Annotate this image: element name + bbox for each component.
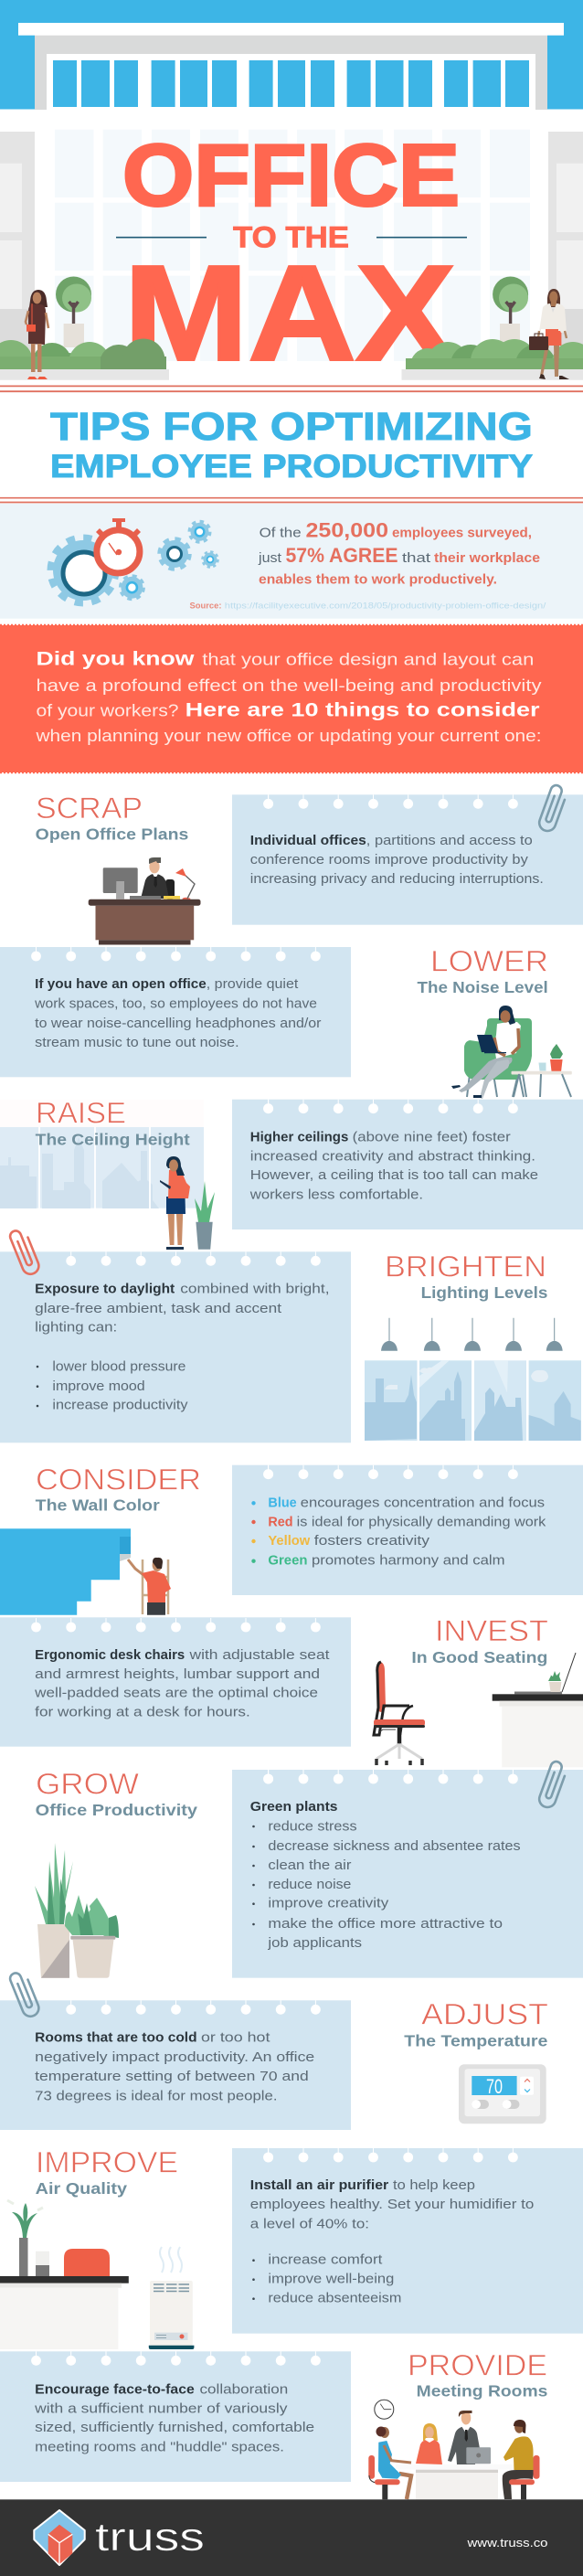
body text: with a sufficient number of variously: [34, 2401, 288, 2416]
statistic text: employees surveyed,: [392, 525, 532, 541]
section 5 heading: consider: CONSIDER: [36, 1463, 201, 1496]
right hedge: [406, 339, 583, 369]
body text: [250, 834, 544, 887]
illustration: office chair: [374, 1662, 425, 1765]
title word: OFFICE: OFFICE: [122, 126, 460, 225]
panel: survey statistic: [0, 504, 583, 619]
illustration: desk with laptop and plant: [493, 1653, 583, 1767]
body text: glare-free ambient, task and accent: [35, 1302, 281, 1316]
body text: sized, sufficiently furnished, comfortable: [35, 2421, 314, 2435]
body text: stream music to tune out noise.: [35, 1036, 239, 1050]
section 1 heading: scrap: [36, 792, 188, 843]
section 6 heading: invest: INVEST: [435, 1614, 548, 1647]
illustration: woman in armchair: [451, 1006, 572, 1099]
body text: , partitions and access to: [366, 834, 533, 848]
body text: with adjustable seat: [188, 1648, 329, 1663]
illustration: painted wall and painter: [0, 1528, 171, 1615]
body text: However, a ceiling that is too tall can make: [250, 1168, 538, 1183]
colour list: fosters creativity: [314, 1534, 430, 1549]
paperclip: [537, 783, 568, 834]
body text: [250, 2178, 534, 2306]
section 5 heading: consider: [36, 1463, 201, 1515]
section 9 heading: improve: [36, 2146, 178, 2198]
panel: scrap text: [232, 783, 583, 925]
stripes under subtitle: [0, 498, 583, 503]
body text: Higher ceilings: [250, 1130, 348, 1144]
illustration: humidifier: [149, 2247, 194, 2349]
section 9 heading: improve: IMPROVE: [36, 2146, 178, 2179]
panel: lower text: [0, 947, 351, 1077]
section 6 heading: invest: [411, 1614, 548, 1666]
clerestory window frame: [47, 54, 535, 110]
body text: Rooms that are too cold: [35, 2030, 197, 2045]
lobby glass panes: [55, 130, 530, 361]
body text: , provide quiet: [207, 977, 298, 992]
section 10 heading: provide: Meeting Rooms: [417, 2382, 547, 2400]
statistic text: 250,000: [305, 519, 388, 541]
paperclip: [8, 1227, 41, 1276]
body text: [249, 1130, 538, 1203]
body text: negatively impact productivity. An office: [35, 2050, 314, 2065]
header: office building: [0, 0, 583, 370]
logo: [34, 2510, 85, 2565]
body text: Exposure to daylight: [35, 1282, 175, 1296]
body text: combined with bright,: [180, 1282, 329, 1296]
icon: right tree: [493, 276, 528, 347]
source: https://facilityexecutive.com/2018/05/productivity-problem-office-design/: [225, 601, 546, 611]
section 2 heading: lower: [417, 945, 548, 996]
colour list: Green: [268, 1554, 307, 1569]
body text: increase comfort: [268, 2253, 382, 2268]
body text: meeting rooms and "huddle" spaces.: [35, 2441, 284, 2455]
body text: Encourage face-to-face: [35, 2382, 195, 2397]
title rules: [116, 237, 467, 239]
section 4 heading: brighten: BRIGHTEN: [385, 1251, 546, 1283]
colour list: encourages concentration and focus: [301, 1496, 545, 1510]
side table and plant: [512, 1044, 572, 1097]
wordmark: truss: [95, 2515, 205, 2560]
plant benefits list: decrease sickness and absentee rates: [268, 1839, 521, 1854]
body text: [34, 977, 322, 1050]
illustration: woman with tablet and plant: [160, 1156, 215, 1250]
intro text: [35, 648, 541, 745]
body text: increase productivity: [52, 1399, 188, 1413]
section 8 heading: adjust: The Temperature: [404, 2031, 548, 2049]
body text: employees healthy. Set your humidifier to: [250, 2198, 534, 2212]
section 4 heading: brighten: Lighting Levels: [421, 1283, 547, 1302]
panel: consider text: [232, 1465, 583, 1595]
illustration: potted plants: [35, 1843, 119, 1978]
colour list: Yellow: [268, 1534, 311, 1549]
body text: to help keep: [393, 2178, 475, 2193]
panel: provide text: [0, 2351, 351, 2482]
subtitle: [50, 405, 533, 484]
statistic text: enables them to work productively.: [259, 571, 497, 587]
paperclip: [537, 1760, 568, 1810]
body text: lower blood pressure: [52, 1359, 186, 1374]
body text: reduce absenteeism: [268, 2292, 401, 2306]
section 7 heading: grow: [36, 1768, 197, 1819]
illustration: counter with flowers: [0, 2200, 129, 2349]
illustration: man at desk: [89, 857, 201, 945]
plant benefits list: Green plants: [250, 1800, 338, 1815]
body text: Install an air purifier: [250, 2178, 389, 2193]
plant benefits list: job applicants: [267, 1936, 362, 1951]
illustration: meeting table and people: [368, 2411, 539, 2499]
section 2 heading: lower: LOWER: [430, 945, 548, 978]
building facade: [35, 35, 547, 110]
section 8 heading: adjust: ADJUST: [421, 1998, 548, 2031]
body text: work spaces, too, so employees do not have: [34, 997, 317, 1012]
footer: [0, 2499, 583, 2576]
statistic text: their workplace: [434, 550, 540, 566]
left chair: [368, 2455, 400, 2499]
table: [396, 2464, 514, 2499]
right chair: [509, 2455, 539, 2499]
stripes under header: [0, 386, 583, 391]
sidewalk planters: [0, 369, 583, 380]
section 3 heading: raise: [36, 1096, 190, 1148]
sky: [0, 0, 583, 110]
intro text: Did you know: [37, 648, 195, 669]
illustration: thermostat: 70: [486, 2075, 503, 2098]
body text: workers less comfortable.: [249, 1188, 423, 1203]
woman in blue dress: [376, 2426, 411, 2499]
body text: [34, 1648, 330, 1720]
statistic text: just: [258, 550, 282, 566]
plant benefits list: make the office more attractive to: [268, 1917, 503, 1932]
person: woman on phone: [26, 290, 48, 379]
title word: MAX: MAX: [124, 238, 455, 389]
section 9 heading: improve: Air Quality: [36, 2179, 127, 2198]
intro text: Here are 10 things to consider: [186, 700, 540, 720]
colour list: promotes harmony and calm: [312, 1554, 504, 1569]
blonde woman: [416, 2423, 442, 2464]
body text: increased creativity and abstract thinking.: [250, 1149, 535, 1164]
section 6 heading: invest: In Good Seating: [411, 1648, 547, 1666]
plant benefits list: reduce noise: [268, 1878, 351, 1892]
body text: lighting can:: [35, 1321, 117, 1336]
panel: adjust text: [0, 1969, 351, 2130]
intro text: have a profound effect on the well-being and productivity: [37, 676, 541, 695]
section 4 heading: brighten: [385, 1251, 547, 1302]
section 3 heading: raise: RAISE: [36, 1096, 126, 1129]
body text: 73 degrees is ideal for most people.: [35, 2089, 277, 2103]
body text: well-padded seats are the optimal choice: [34, 1687, 318, 1701]
website: www.truss.co: [466, 2536, 548, 2549]
body text: (above nine feet) foster: [353, 1130, 511, 1144]
colour list: Blue: [268, 1496, 297, 1510]
man in yellow sweater: [503, 2420, 534, 2499]
body text: or too hot: [201, 2030, 270, 2045]
statistic text: [258, 519, 540, 587]
panel: grow text: [232, 1760, 583, 1978]
statistic text: that: [402, 550, 431, 566]
side wings: [0, 132, 583, 370]
illustration: pendant lights: [381, 1318, 563, 1351]
body text: [34, 2382, 314, 2455]
intro text: of your workers?: [37, 702, 179, 720]
body text: improve well-being: [268, 2273, 394, 2287]
section 3 window illustration: [0, 1100, 204, 1208]
roof: [18, 23, 564, 36]
statistic text: 57% AGREE: [285, 544, 398, 567]
body text: a level of 40% to:: [250, 2218, 369, 2232]
section 10 heading: provide: PROVIDE: [408, 2348, 547, 2381]
title words: TO THE: TO THE: [233, 220, 349, 253]
body text: Individual offices: [250, 834, 366, 848]
intro text: when planning your new office or updating your current one:: [35, 727, 541, 745]
laptop: [466, 2447, 491, 2464]
body text: Ergonomic desk chairs: [35, 1648, 185, 1663]
left hedge: [0, 338, 166, 369]
panel: invest text: [0, 1617, 351, 1747]
desk: [89, 899, 201, 945]
icon: left tree: [56, 276, 91, 347]
section 7 heading: grow: Office Productivity: [36, 1801, 197, 1819]
section 1 heading: scrap: SCRAP: [36, 792, 143, 825]
plant benefits list: reduce stress: [268, 1819, 357, 1834]
clerestory windows: [53, 60, 529, 107]
body text: collaboration: [199, 2382, 288, 2397]
plant benefits list: improve creativity: [268, 1897, 389, 1911]
body text: conference rooms improve productivity by: [250, 853, 529, 868]
illustration: thermostat: [459, 2064, 546, 2124]
person: woman with briefcase: [529, 289, 569, 379]
body text: If you have an open office: [35, 977, 207, 992]
body text: [35, 1282, 329, 1413]
section 5 heading: consider: The Wall Color: [36, 1496, 160, 1515]
illustration: city windows: [365, 1360, 581, 1441]
plant benefits list: [250, 1800, 521, 1951]
body text: [35, 2030, 314, 2103]
title: [116, 126, 467, 389]
intro text: that your office design and layout can: [202, 650, 534, 668]
standing man in suit: [448, 2411, 481, 2464]
panel: improve text: [232, 2148, 583, 2334]
colour list: [251, 1496, 546, 1569]
body text: and armrest heights, lumbar support and: [35, 1667, 320, 1682]
panel: brighten text: [0, 1227, 351, 1442]
section 10 heading: provide: [408, 2348, 547, 2400]
colour list: is ideal for physically demanding work: [297, 1515, 546, 1529]
section 7 heading: grow: GROW: [36, 1768, 140, 1801]
section 3 heading: raise: The Ceiling Height: [36, 1130, 190, 1148]
source: Source:: [190, 601, 221, 611]
icon: gears and stopwatch: [51, 518, 217, 602]
body text: temperature setting of between 70 and: [35, 2070, 309, 2084]
colour list: Red: [268, 1515, 293, 1529]
subtitle line 1: TIPS FOR OPTIMIZING: [50, 405, 533, 449]
statistic text: Of the: [260, 525, 302, 541]
thermostat screen: [472, 2076, 517, 2095]
subtitle line 2: EMPLOYEE PRODUCTIVITY: [50, 449, 533, 484]
plant benefits list: clean the air: [268, 1858, 352, 1873]
section 1 heading: scrap: Open Office Plans: [36, 825, 188, 843]
panel: did you know: [0, 625, 583, 773]
body text: for working at a desk for hours.: [35, 1706, 250, 1720]
section 8 heading: adjust: [404, 1998, 548, 2049]
illustration: wall clock: [375, 2400, 394, 2419]
paperclip: [8, 1969, 41, 2018]
panel: raise text: [232, 1100, 583, 1229]
section 2 heading: lower: The Noise Level: [417, 978, 548, 996]
body text: increasing privacy and reducing interruptions.: [250, 872, 544, 887]
body text: to wear noise-cancelling headphones and/or: [35, 1017, 322, 1031]
body text: improve mood: [52, 1379, 145, 1394]
